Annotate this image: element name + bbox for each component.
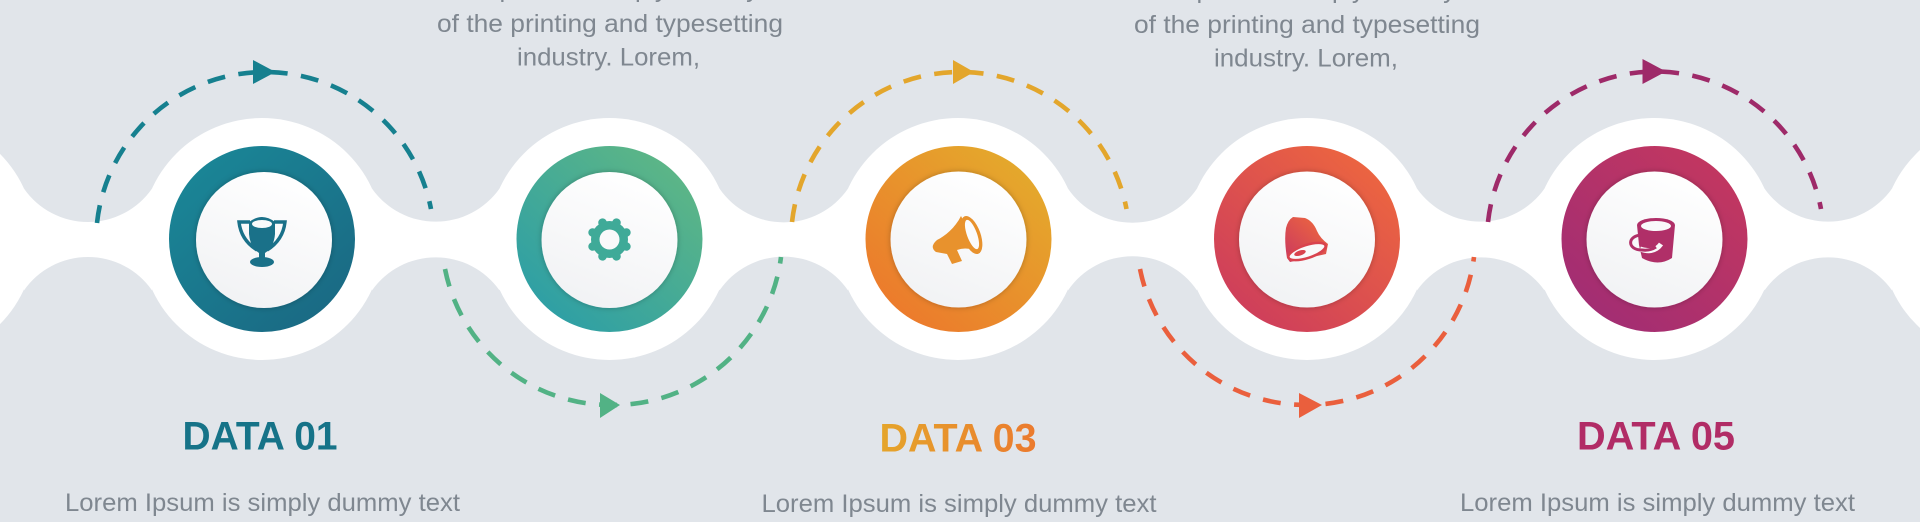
icon: megaphone — [933, 213, 987, 264]
node 3: megaphone ring — [866, 146, 1052, 332]
bottom text: step 5: Lorem Ipsum is simply dummy text — [1460, 489, 1855, 517]
top text block: step 4 — [1110, 0, 1505, 72]
top text block: step 2 — [412, 0, 808, 72]
node 2: gear ring — [516, 146, 702, 332]
icon: bucket — [1631, 218, 1675, 262]
node 4: bell ring — [1214, 146, 1400, 332]
top text block: step 4: of the printing and typesetting — [1134, 11, 1480, 39]
top text block: step 4: industry. Lorem, — [1214, 44, 1398, 72]
arrow 5: magenta dashed arc — [1488, 59, 1821, 222]
arrow 4: red-orange dashed arc — [1140, 257, 1474, 418]
node 5: bucket ring — [1562, 146, 1748, 332]
bottom text: step 3: Lorem Ipsum is simply dummy text — [762, 490, 1157, 518]
icon: trophy — [239, 217, 285, 267]
arrow 1: teal dashed arc — [97, 60, 431, 223]
top text block: step 2: industry. Lorem, — [517, 44, 700, 72]
heading: DATA 03: DATA 03 — [880, 416, 1036, 460]
arrow 3: amber dashed arc — [792, 60, 1126, 222]
bottom text: step 1: Lorem Ipsum is simply dummy text — [65, 489, 460, 517]
icon: bell — [1285, 217, 1328, 264]
node 1: trophy ring — [169, 146, 355, 332]
icon: gear — [591, 221, 628, 258]
top text block: step 2: of the printing and typesetting — [437, 10, 783, 38]
white wavy connector band — [0, 118, 1920, 360]
arrow 2: green dashed arc — [445, 257, 781, 418]
heading: DATA 05: DATA 05 — [1577, 414, 1735, 458]
heading: DATA 01: DATA 01 — [182, 414, 338, 458]
